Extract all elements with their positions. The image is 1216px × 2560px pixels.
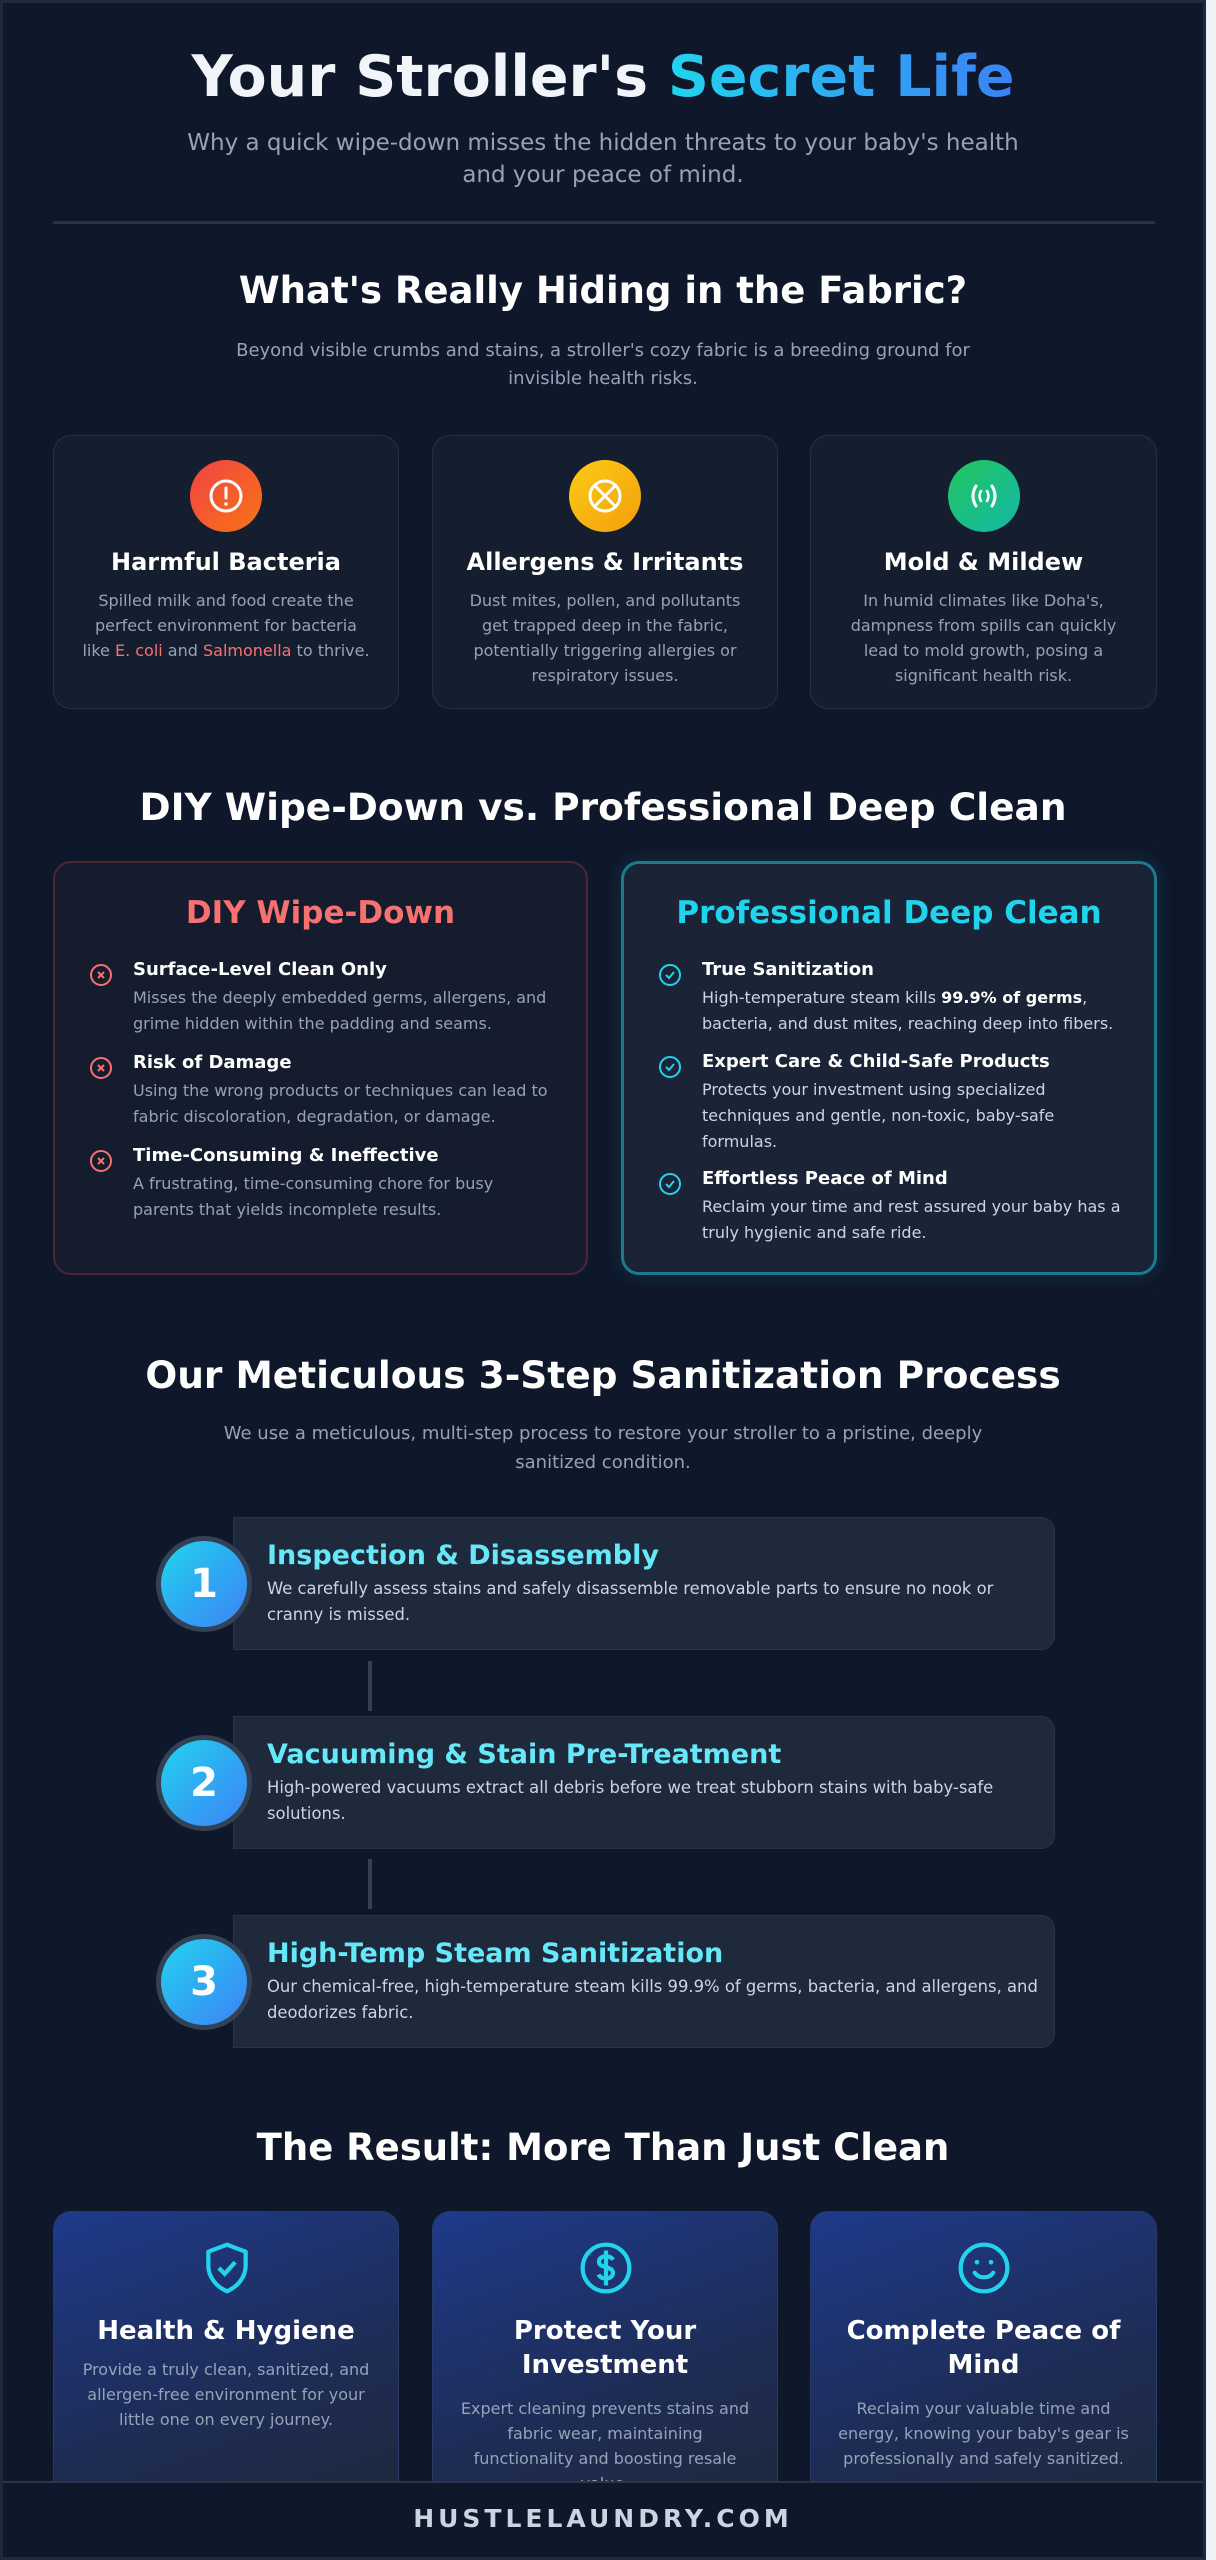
- panel: DIY: Risk of Damage: [133, 1052, 292, 1073]
- heading: result: The Result: More Than Just Clean: [257, 2126, 949, 2169]
- title: Your Stroller's Secret Life: [191, 44, 1015, 110]
- subtitle: Why a quick wipe-down misses the hidden threats to your baby's health: [187, 130, 1019, 156]
- panel: DIY: A frustrating, time-consuming chore for busy parents that yields incomplete results.: [133, 1174, 493, 1219]
- panel: DIY: Misses the deeply embedded germs, allergens, and grime hidden within the padding and seams.: [133, 988, 546, 1033]
- step 1 number: 1: [190, 1561, 218, 1607]
- result card: peace: Complete Peace of Mind: [847, 2316, 1120, 2380]
- result card: health: [53, 2211, 399, 2511]
- subtitle: [187, 130, 1019, 188]
- step 2 number: [156, 1735, 252, 1831]
- process intro: We use a meticulous, multi-step process to restore your stroller to a pristine, deeply sanitized condition.: [224, 1423, 982, 1473]
- panel: harmful bacteria: Spilled milk and food create the perfect environment for bacteria like E. coli and Salmonella to thrive.: [82, 591, 370, 660]
- panel: professional: Protects your investment using specialized techniques and gentle, non-toxic, baby-safe formulas.: [702, 1080, 1054, 1151]
- panel: DIY: DIY Wipe-Down: [186, 895, 455, 931]
- panel: DIY: Using the wrong products or techniques can lead to fabric discoloration, degradation, or damage.: [133, 1081, 548, 1126]
- step 2: Vacuuming & Stain Pre-Treatment: [267, 1739, 781, 1770]
- step 3: High-Temp Steam Sanitization: [267, 1938, 723, 1969]
- panel: professional: High-temperature steam kills 99.9% of germs, bacteria, and dust mites, reaching deep into fibers.: [702, 988, 1113, 1033]
- step 3: Our chemical-free, high-temperature steam kills 99.9% of germs, bacteria, and allergens, and deodorizes fabric.: [267, 1977, 1038, 2022]
- result card: investment: [432, 2211, 778, 2511]
- panel: professional: Effortless Peace of Mind: [702, 1168, 948, 1189]
- panel: professional: Reclaim your time and rest assured your baby has a truly hygienic and safe ride.: [702, 1197, 1120, 1242]
- result card: health: Health & Hygiene: [97, 2316, 355, 2346]
- item: peace of mind: [659, 1168, 1120, 1242]
- step 3 number: 3: [190, 1959, 218, 2005]
- icon: smile: [958, 2242, 1010, 2294]
- subtitle: and your peace of mind.: [462, 162, 744, 188]
- panel: professional: True Sanitization: [702, 959, 874, 980]
- item: time: [90, 1145, 493, 1219]
- result card: peace: [810, 2211, 1157, 2511]
- panel: allergens: [432, 435, 778, 709]
- step 1: We carefully assess stains and safely disassemble removable parts to ensure no nook or cranny is missed.: [267, 1579, 993, 1624]
- step 2 number: 2: [190, 1760, 218, 1806]
- result card: health: Provide a truly clean, sanitized, and allergen-free environment for your little one on every journey.: [83, 2360, 369, 2429]
- panel: DIY: Surface-Level Clean Only: [133, 959, 387, 980]
- step 2: High-powered vacuums extract all debris before we treat stubborn stains with baby-safe solutions.: [267, 1778, 993, 1823]
- icon: x circle: [569, 460, 641, 532]
- footer: HUSTLELAUNDRY.COM: [413, 2504, 793, 2533]
- item: surface level: [90, 959, 546, 1033]
- panel: professional: Professional Deep Clean: [676, 895, 1102, 931]
- panel: mold: In humid climates like Doha's, dampness from spills can quickly lead to mold growth, posing a significant health risk.: [851, 591, 1116, 685]
- panel: allergens: Dust mites, pollen, and pollutants get trapped deep in the fabric, potentially triggering allergies or respiratory issues.: [470, 591, 740, 685]
- result card: peace: Reclaim your valuable time and energy, knowing your baby's gear is professionally and safely sanitized.: [838, 2399, 1129, 2468]
- icon: signal: [948, 460, 1020, 532]
- panel: mold: [810, 435, 1157, 709]
- panel: professional: [621, 861, 1157, 1275]
- panel: DIY: Time-Consuming & Ineffective: [133, 1145, 439, 1166]
- icon: alert: [190, 460, 262, 532]
- item: risk: [90, 1052, 548, 1126]
- step 1: [233, 1517, 1055, 1650]
- step 1 number: [156, 1536, 252, 1632]
- item: expert care: [659, 1051, 1054, 1151]
- step 3 number: [156, 1934, 252, 2030]
- intro text: Beyond visible crumbs and stains, a stroller's cozy fabric is a breeding ground for invisible health risks.: [236, 340, 970, 389]
- panel: allergens: Allergens & Irritants: [467, 548, 743, 576]
- step 2: [233, 1716, 1055, 1849]
- panel: harmful bacteria: Harmful Bacteria: [111, 548, 341, 576]
- step 1: Inspection & Disassembly: [267, 1540, 659, 1571]
- step 3: [233, 1915, 1055, 2048]
- panel: DIY: [53, 861, 588, 1275]
- panel: mold: Mold & Mildew: [884, 548, 1083, 576]
- footer: [3, 2481, 1203, 2557]
- panel: professional: Expert Care & Child-Safe Products: [702, 1051, 1050, 1072]
- item: sanitization: [659, 959, 1113, 1033]
- icon: dollar: [580, 2242, 632, 2294]
- result card: investment: Expert cleaning prevents stains and fabric wear, maintaining functionality and boosting resale value.: [461, 2399, 749, 2493]
- icon: shield: [206, 2242, 248, 2294]
- heading: process: Our Meticulous 3-Step Sanitization Process: [145, 1353, 1061, 1397]
- result card: investment: Protect Your Investment: [514, 2316, 696, 2380]
- panel: harmful bacteria: [53, 435, 399, 709]
- heading: hiding in fabric: What's Really Hiding in the Fabric?: [239, 269, 967, 312]
- heading: comparison: DIY Wipe-Down vs. Professional Deep Clean: [139, 785, 1067, 829]
